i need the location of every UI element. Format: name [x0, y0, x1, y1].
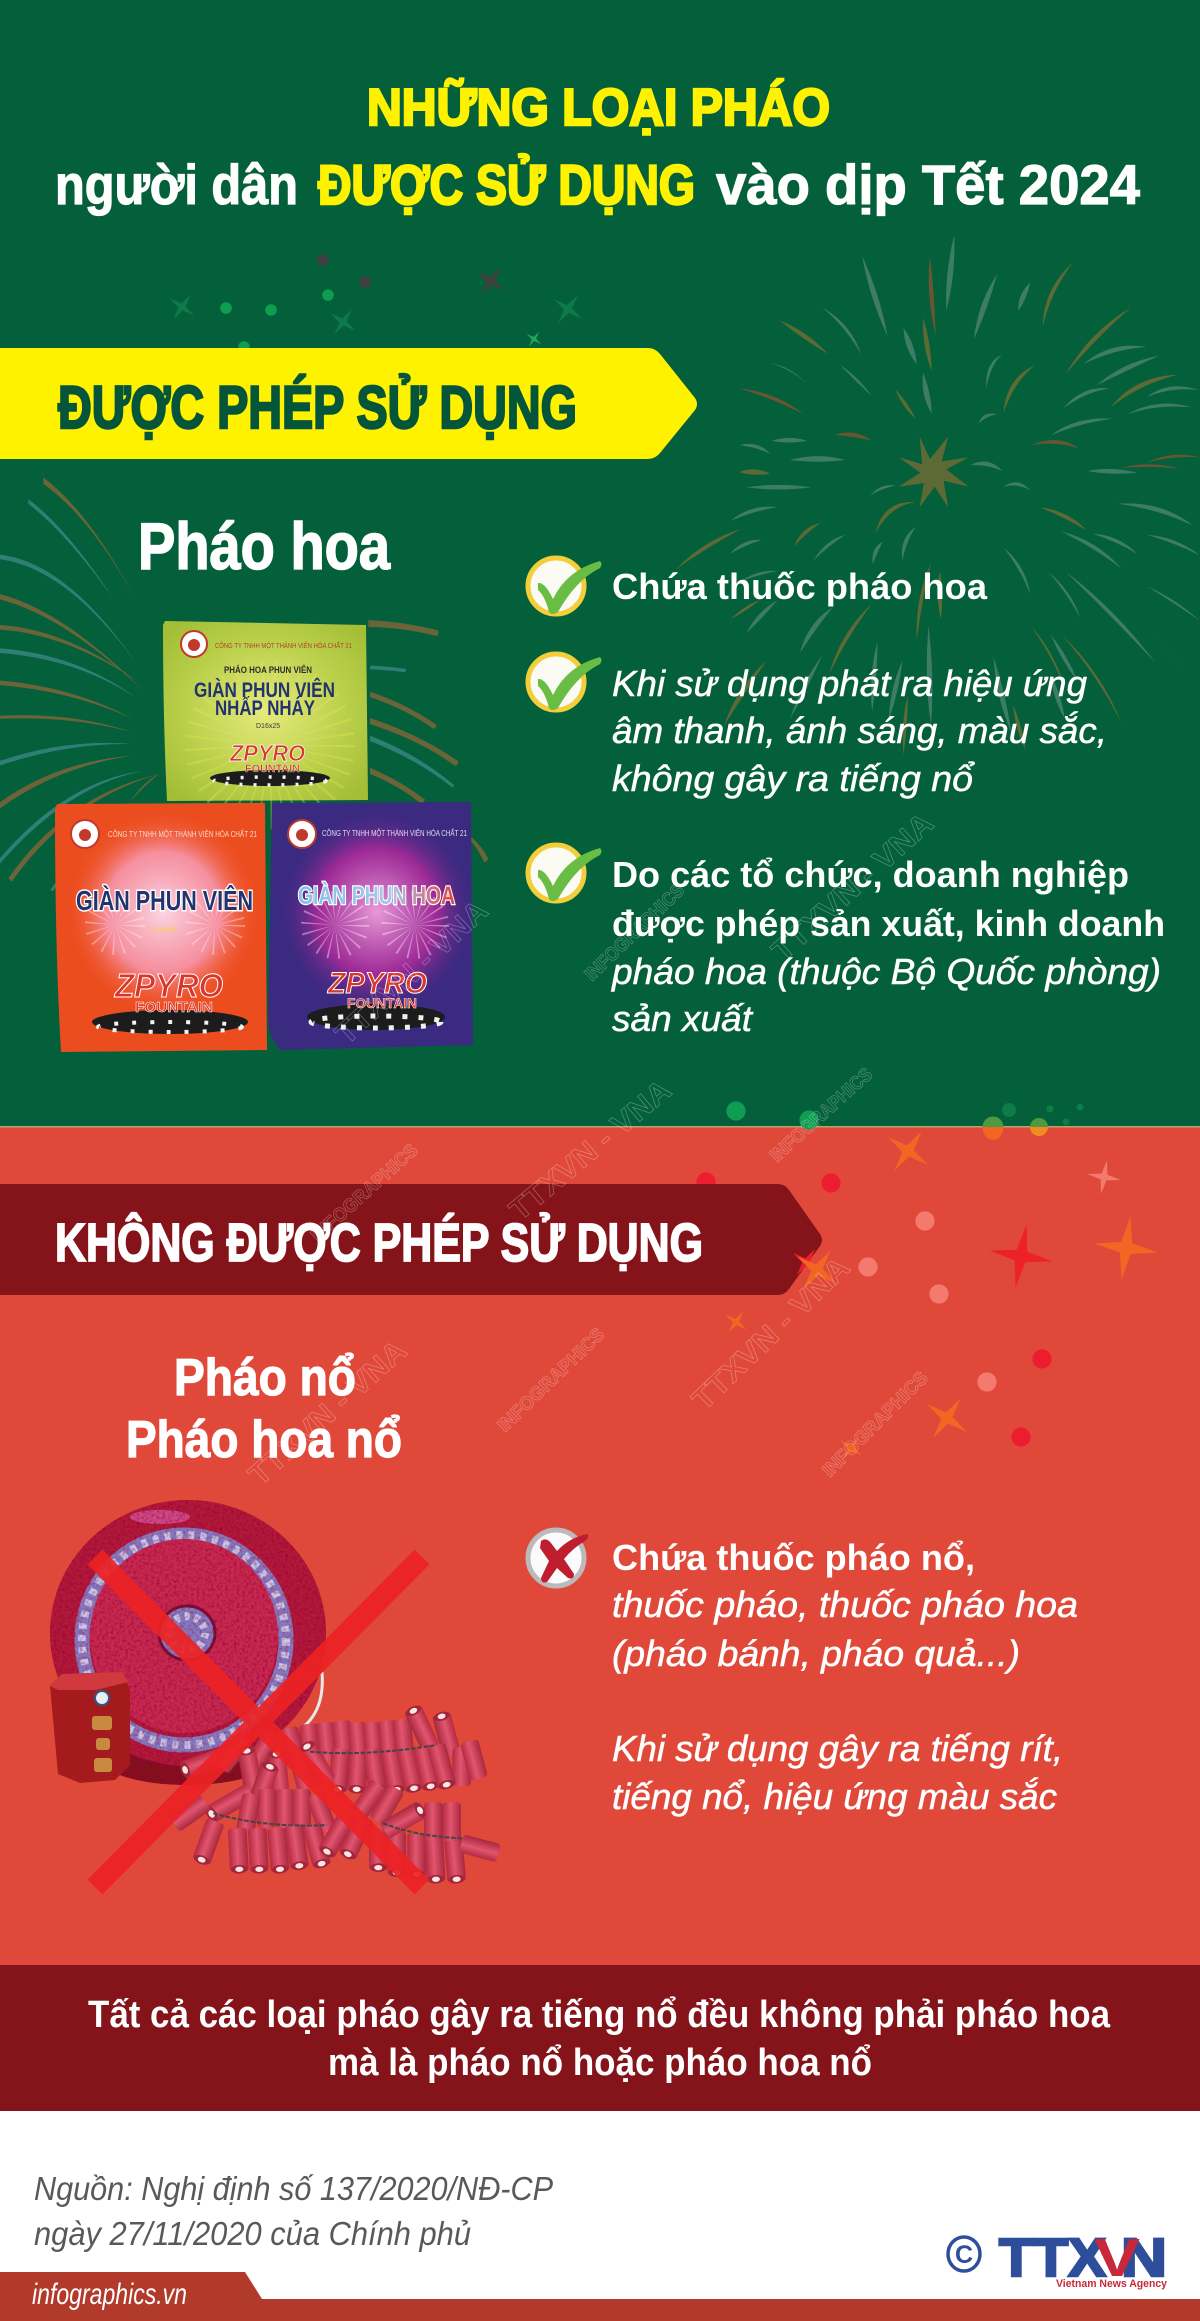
title line 2: vào dịp Tết 2024 — [716, 153, 1140, 216]
watermarks — [243, 807, 940, 1492]
heading: pháo hoa: Pháo hoa — [138, 509, 391, 583]
banner: được phép sử dụng: ĐƯỢC PHÉP SỬ DỤNG — [58, 374, 577, 441]
watermarks: TTXVN - VNA — [329, 894, 494, 1051]
watermarks: TTXVN - VNA — [766, 807, 940, 968]
small stars and dots, top left — [161, 254, 592, 353]
red cross — [95, 1557, 422, 1887]
panel: green background — [0, 0, 1200, 1127]
orange box: GIÀN PHUN VIÊN — [76, 885, 253, 916]
green box: ZPYRO — [229, 740, 305, 766]
icon: cross — [528, 1530, 588, 1586]
title line 1: NHỮNG LOẠI PHÁO — [367, 78, 830, 137]
logo: TTXVN: TTX — [999, 2228, 1106, 2288]
list: prohibited fireworks: (pháo bánh, pháo quả...) — [612, 1633, 1020, 1674]
logo: TTXVN — [948, 2228, 1168, 2290]
watermarks: INFOGRAPHICS — [819, 1368, 933, 1482]
logo: TTXVN: N — [1121, 2228, 1167, 2288]
watermarks: INFOGRAPHICS — [494, 1324, 609, 1437]
list: prohibited fireworks: thuốc pháo, thuốc pháo hoa — [612, 1584, 1078, 1625]
footer ribbon — [0, 2272, 1200, 2321]
panel: white footer background — [0, 2111, 1200, 2321]
heading: pháo nổ, pháo hoa nổ: Pháo nổ — [174, 1349, 356, 1407]
check item 1: Chứa thuốc pháo hoa — [612, 566, 988, 607]
orange box: FOUNTAIN — [135, 999, 213, 1016]
icon: check — [528, 654, 602, 710]
large firework decoration, right — [676, 235, 1200, 755]
green box: FOUNTAIN — [245, 763, 300, 775]
purple box: CÔNG TY TNHH MỘT THÀNH VIÊN HÓA CHẤT 21 — [322, 828, 467, 838]
purple box: FOUNTAIN — [347, 995, 417, 1011]
check item 3: sản xuất — [612, 998, 754, 1039]
title line 2: người dân — [55, 153, 298, 216]
logo: TTXVN: Vietnam News Agency — [1056, 2278, 1168, 2290]
source text: ngày 27/11/2020 của Chính phủ — [34, 2215, 471, 2252]
banner: không được phép sử dụng — [0, 1184, 822, 1295]
watermarks: TTXVN - VNA — [686, 1251, 856, 1417]
icon: check — [528, 558, 602, 614]
check item 2 — [528, 654, 1107, 799]
orange box — [55, 803, 267, 1052]
green box: GIÀN PHUN VIÊN — [194, 678, 335, 702]
logo: TTXVN: C — [955, 2241, 973, 2269]
callout band: mà là pháo nổ hoặc pháo hoa nổ — [328, 2042, 872, 2084]
purple box: GIÀN PHUN HOA — [298, 881, 455, 910]
green box: NHẤP NHÁY — [215, 697, 315, 720]
product boxes: fireworks — [55, 621, 477, 1052]
firecracker strings — [169, 1703, 501, 1884]
firework wheel — [50, 1500, 326, 1785]
list: prohibited fireworks: Chứa thuốc pháo nổ, — [612, 1537, 975, 1578]
watermarks: INFOGRAPHICS — [766, 1064, 877, 1167]
watermarks: INFOGRAPHICS — [307, 1140, 422, 1247]
watermarks: TTXVN - VNA — [503, 1074, 678, 1227]
stars over red section — [718, 1118, 1162, 1466]
heading: pháo nổ, pháo hoa nổ: Pháo hoa nổ — [126, 1411, 402, 1469]
purple box — [268, 802, 477, 1050]
cylinder box — [50, 1672, 130, 1783]
title line 2 — [55, 153, 1140, 216]
watermarks: INFOGRAPHICS — [581, 880, 689, 986]
check item 2: âm thanh, ánh sáng, màu sắc, — [612, 710, 1107, 751]
panel: red background — [0, 1127, 1200, 1965]
image: firecrackers with red cross — [50, 1500, 501, 1887]
source text: Nguồn: Nghị định số 137/2020/NĐ-CP — [34, 2170, 553, 2207]
orange box: ZPYRO — [114, 967, 223, 1004]
banner: không được phép sử dụng: KHÔNG ĐƯỢC PHÉP SỬ DỤNG — [55, 1212, 703, 1273]
green box: CÔNG TY TNHH MỘT THÀNH VIÊN HÓA CHẤT 21 — [215, 640, 352, 650]
callout band: Tất cả các loại pháo gây ra tiếng nổ đều không phải pháo hoa — [88, 1994, 1111, 2036]
check item 2: Khi sử dụng phát ra hiệu ứng — [612, 663, 1087, 704]
orange box: D 16x25 — [150, 927, 176, 934]
list: prohibited fireworks: tiếng nổ, hiệu ứng màu sắc — [612, 1776, 1057, 1817]
green box: D16x25 — [256, 723, 280, 730]
check item 2: không gây ra tiếng nổ — [612, 758, 975, 799]
check item 1 — [528, 558, 988, 614]
list: prohibited fireworks: Khi sử dụng gây ra tiếng rít, — [612, 1728, 1063, 1769]
boundary line — [0, 1126, 1200, 1128]
logo: TTXVN: V — [1094, 2228, 1140, 2288]
source text — [34, 2170, 553, 2252]
heading: pháo nổ, pháo hoa nổ — [126, 1349, 402, 1469]
green box — [163, 621, 368, 801]
left firework rays — [0, 477, 488, 891]
check item 3 — [528, 845, 1165, 1039]
check item 3: được phép sản xuất, kinh doanh — [612, 903, 1165, 944]
stars and dots, red section — [696, 1101, 1084, 1447]
list: prohibited fireworks — [528, 1530, 1078, 1817]
orange box: CÔNG TY TNHH MỘT THÀNH VIÊN HÓA CHẤT 21 — [108, 829, 257, 839]
icon: check — [528, 845, 602, 901]
green box: PHÁO HOA PHUN VIÊN — [224, 664, 312, 675]
check item 3: Do các tổ chức, doanh nghiệp — [612, 854, 1129, 895]
list: allowed fireworks — [528, 558, 1165, 1039]
footer ribbon: infographics.vn — [32, 2278, 187, 2311]
title line 2: ĐƯỢC SỬ DỤNG — [318, 153, 695, 216]
check item 3: pháo hoa (thuộc Bộ Quốc phòng) — [611, 951, 1161, 992]
watermarks: TTXVN - VNA — [243, 1334, 413, 1492]
callout band — [0, 1965, 1200, 2111]
banner: được phép sử dụng — [0, 348, 697, 459]
wheel rim highlight — [302, 1672, 322, 1728]
title — [55, 78, 1140, 216]
purple box: ZPYRO — [327, 967, 427, 1000]
